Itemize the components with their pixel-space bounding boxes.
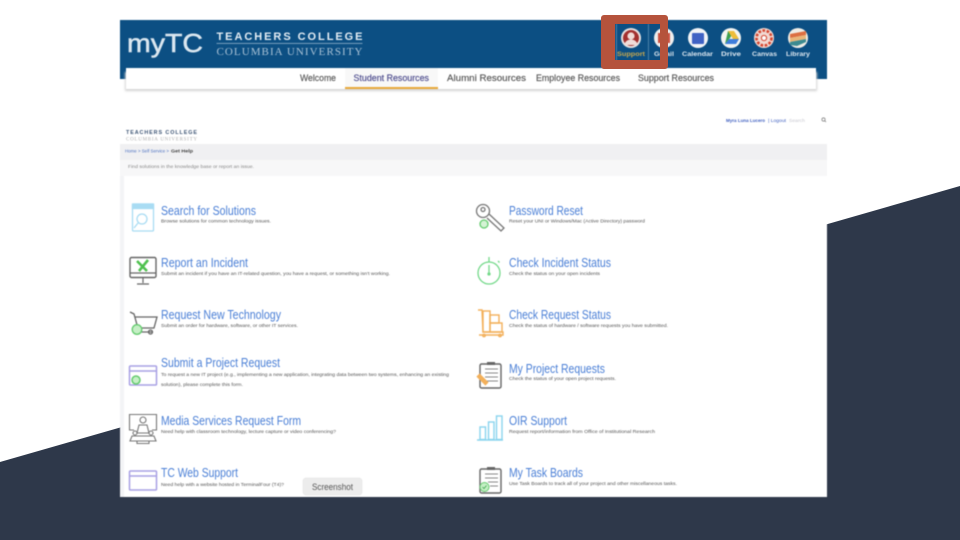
item: Media Services Request Form: Media Services Request Form <box>161 414 301 428</box>
breadcrumb band <box>120 144 827 160</box>
icon: purple window <box>130 471 156 490</box>
icon: purple window with plus <box>130 366 156 385</box>
icon: drive: Drive <box>721 51 741 58</box>
item: TC Web Support: Need help with a website hosted in TerminalFour (T4)? <box>161 482 284 488</box>
item: My Task Boards <box>480 466 677 493</box>
screenshot panel <box>120 20 827 497</box>
icon: shopping cart <box>130 312 157 334</box>
item: My Project Requests: My Project Requests <box>509 362 605 376</box>
icon: gmail <box>654 28 674 58</box>
intro band: Find solutions in the knowledge base or report an issue. <box>128 164 254 169</box>
item: Check Incident Status: Check Incident Status <box>509 256 611 270</box>
item: Submit a Project Request: Submit a Project Request <box>161 356 280 370</box>
icon: calendar: Calendar <box>682 51 714 58</box>
site logo small <box>126 130 197 142</box>
item: TC Web Support: TC Web Support <box>161 466 238 480</box>
item: TC Web Support <box>130 466 284 490</box>
item: OIR Support: Request report/information from Office of Institutional Research <box>509 429 655 435</box>
icon: calendar <box>682 28 714 58</box>
item: My Project Requests: Check the status of your open project requests. <box>509 376 616 382</box>
item: Check Request Status: Check Request Status <box>509 308 611 322</box>
description: To request a new IT project (e.g., implementing a new application, integrating data between two systems, enhancing an existing <box>161 372 449 378</box>
item: Report an Incident: Submit an incident if you have an IT-related question, you have a request, or something isn't working. <box>161 271 390 277</box>
description <box>161 372 449 388</box>
user links: Search <box>789 118 805 123</box>
item: Request New Technology: Submit an order for hardware, software, or other IT services. <box>161 323 298 329</box>
icon: gmail: Gmail <box>654 51 674 58</box>
breadcrumb band: Home > Self Service > <box>125 148 169 154</box>
Teachers College logo: COLUMBIA UNIVERSITY <box>216 46 363 58</box>
item: Check Request Status: Check the status of hardware / software requests you have submitted. <box>509 323 668 329</box>
item: Request New Technology: Request New Technology <box>161 308 282 322</box>
item: Search for Solutions: Browse solutions for common technology issues. <box>161 218 271 224</box>
icon: canvas: Canvas <box>752 51 777 58</box>
red highlight box around Support <box>601 15 668 69</box>
item: My Project Requests <box>478 362 616 388</box>
icon: orange hand truck <box>478 310 503 337</box>
navigation bar: Welcome <box>300 73 336 84</box>
item: Request New Technology <box>130 308 298 334</box>
user links: | Logout <box>768 118 787 123</box>
Teachers College logo: TEACHERS COLLEGE <box>216 31 362 43</box>
icon: support <box>617 28 646 58</box>
site logo small: COLUMBIA UNIVERSITY <box>126 138 197 142</box>
item: Report an Incident: Report an Incident <box>161 256 248 270</box>
navigation bar: Student Resources <box>354 73 429 84</box>
icon: clipboard with check <box>480 467 501 493</box>
item: Check Request Status <box>478 308 668 337</box>
item: Search for Solutions: Search for Solutions <box>161 204 256 218</box>
header bar <box>120 20 827 79</box>
site logo small: TEACHERS COLLEGE <box>126 130 197 136</box>
icon: library <box>786 28 810 58</box>
background: dark diagonal shape <box>0 186 960 540</box>
item: Password Reset: Password Reset <box>509 204 583 218</box>
intro band <box>120 160 827 176</box>
icon: search window <box>132 204 154 231</box>
navigation bar: Employee Resources <box>536 73 620 84</box>
user links: Myra Luna Lucero <box>726 118 765 123</box>
navigation bar <box>125 68 817 91</box>
breadcrumb band: Get Help <box>171 148 193 154</box>
tooltip: Screenshot: Screenshot <box>312 482 353 492</box>
Teachers College logo <box>216 31 363 58</box>
user links <box>726 118 826 123</box>
navigation bar: Support Resources <box>638 73 714 84</box>
item: Password Reset <box>476 204 645 231</box>
myTC wordmark: myTC <box>127 28 203 58</box>
item: Password Reset: Reset your UNI or Windows/Mac (Active Directory) password <box>509 218 645 224</box>
item: OIR Support: OIR Support <box>509 414 567 428</box>
item: Search for Solutions <box>132 204 271 231</box>
icon: drive <box>721 28 741 58</box>
icon: key with plus <box>476 204 504 231</box>
description: solution), please complete this form. <box>161 382 243 388</box>
item: Report an Incident <box>130 256 390 284</box>
icon: presenter screen with audience <box>130 414 156 444</box>
icon: library: Library <box>786 51 810 58</box>
item: Media Services Request Form <box>130 414 336 444</box>
navigation bar: Alumni Resources <box>447 73 526 84</box>
icon: canvas <box>752 28 777 58</box>
item: My Task Boards: Use Task Boards to track all of your project and other miscellaneous tasks. <box>509 481 677 487</box>
item: OIR Support <box>477 414 655 440</box>
icon: monitor with tools <box>130 258 156 284</box>
item: Check Incident Status: Check the status on your open incidents <box>509 271 601 277</box>
item: Media Services Request Form: Need help with classroom technology, lecture capture or video conferencing? <box>161 429 336 435</box>
icon: clipboard with pencil <box>478 362 501 388</box>
icon: bar chart <box>477 416 503 440</box>
app icons row <box>616 24 810 64</box>
icon: support: Support <box>617 51 646 58</box>
tooltip: Screenshot <box>303 478 362 495</box>
icon: stopwatch <box>478 257 500 284</box>
item: My Task Boards: My Task Boards <box>509 466 583 480</box>
item: Check Incident Status <box>478 256 611 284</box>
item: Submit a Project Request <box>130 356 449 388</box>
